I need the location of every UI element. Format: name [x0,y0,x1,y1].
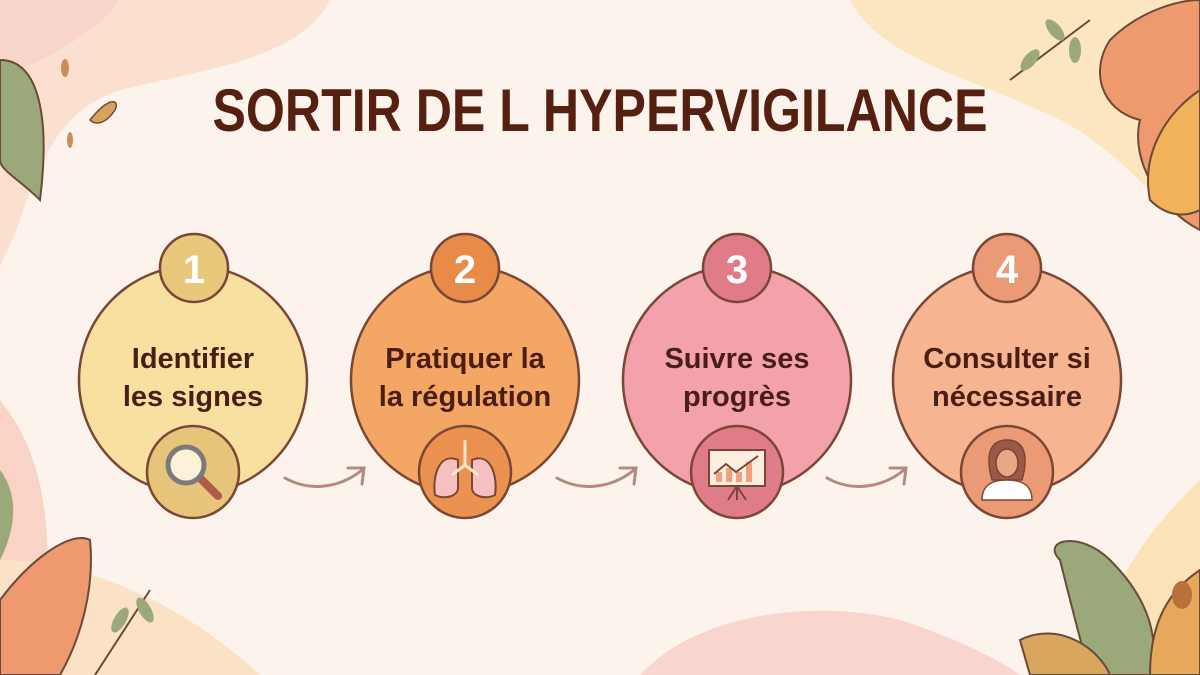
step 4: nécessaire [932,381,1082,413]
arrow 3 [827,468,906,486]
step 1: 1 [183,248,205,292]
step 3: progrès [683,381,791,413]
decoration: top-right leaves [1010,0,1200,230]
decoration: bottom-right leaves [1020,541,1200,675]
icon: chart board [691,426,783,518]
step 4 [893,234,1121,518]
step 2: 2 [454,248,476,292]
step 3 [623,234,851,518]
step 3: 3 [726,248,748,292]
step 2: Pratiquer la [385,343,546,375]
step 2 [351,234,579,518]
decoration: bottom-left leaves [0,470,157,675]
step 4: 4 [996,248,1019,292]
arrow 1 [285,468,364,486]
icon: doctor [961,426,1053,518]
step 1: Identifier [132,343,254,375]
step 2: la régulation [379,381,551,413]
step 1 [79,234,307,518]
step 3: Suivre ses [664,343,810,375]
step 4: Consulter si [923,343,1091,375]
step 1: les signes [123,381,263,413]
icon: lungs [419,426,511,518]
title: SORTIR DE L HYPERVIGILANCE [212,77,988,144]
arrow 2 [557,468,636,486]
decoration: top-left leaves [0,59,116,200]
icon: magnifier [147,426,239,518]
